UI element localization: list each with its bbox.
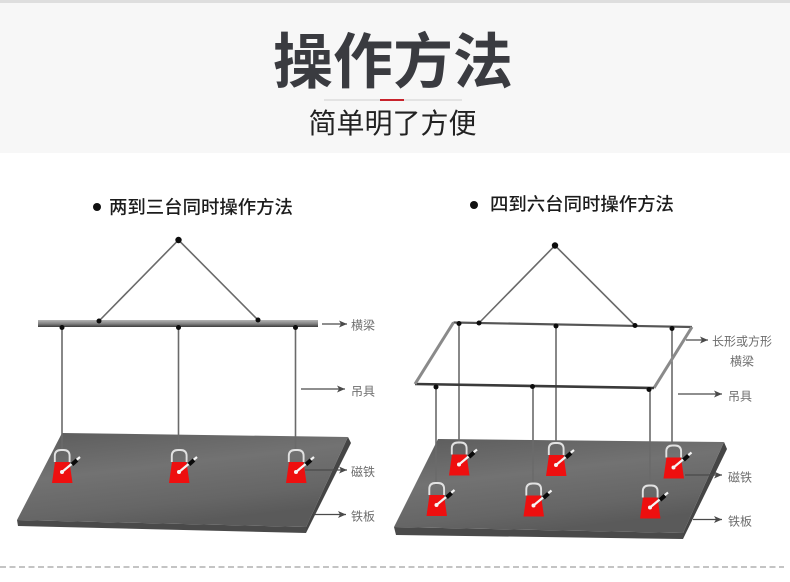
heading: left method: 两到三台同时操作方法 [109,196,293,218]
callout: plate left: 铁板 [351,510,375,524]
joint dots left [60,237,298,330]
callout: magnet left [305,464,375,479]
callout: sling right [678,390,752,404]
callout: frame crossbeam [686,334,772,368]
title divider [324,99,462,101]
callout: magnet right: 磁铁 [728,470,752,484]
callout: sling left: 吊具 [351,384,375,398]
hanging wires right [436,323,672,488]
magnets right [426,442,692,518]
title: 操作方法 [273,29,513,96]
callout: plate left [315,510,375,524]
magnets left [52,450,314,483]
header panel [0,0,790,153]
hanging wires left [62,327,296,450]
callout: frame crossbeam: 横梁 [730,354,754,368]
panel: four to six machines [394,194,772,539]
rectangular frame [415,322,692,388]
heading: right method: 四到六台同时操作方法 [490,194,674,214]
callout: frame crossbeam: 长形或方形 [712,334,772,348]
callout: crossbeam left [322,318,375,332]
joint dots right [434,242,674,392]
sling triangle left [99,240,258,321]
callout: plate right [693,514,752,528]
callout: sling left [301,384,375,398]
crossbeam left [38,320,318,327]
callout: sling right: 吊具 [728,390,752,404]
steel plate right [394,439,727,539]
callout: crossbeam left: 横梁 [351,318,375,332]
sling triangle right [479,246,635,326]
subtitle: 简单明了方便 [308,108,477,139]
panel: two to three machines [17,196,375,533]
dashed footer divider [0,566,784,568]
callout: magnet right [685,470,752,484]
callout: plate right: 铁板 [728,514,752,528]
steel plate left [17,433,351,533]
callout: magnet left: 磁铁 [351,464,375,479]
